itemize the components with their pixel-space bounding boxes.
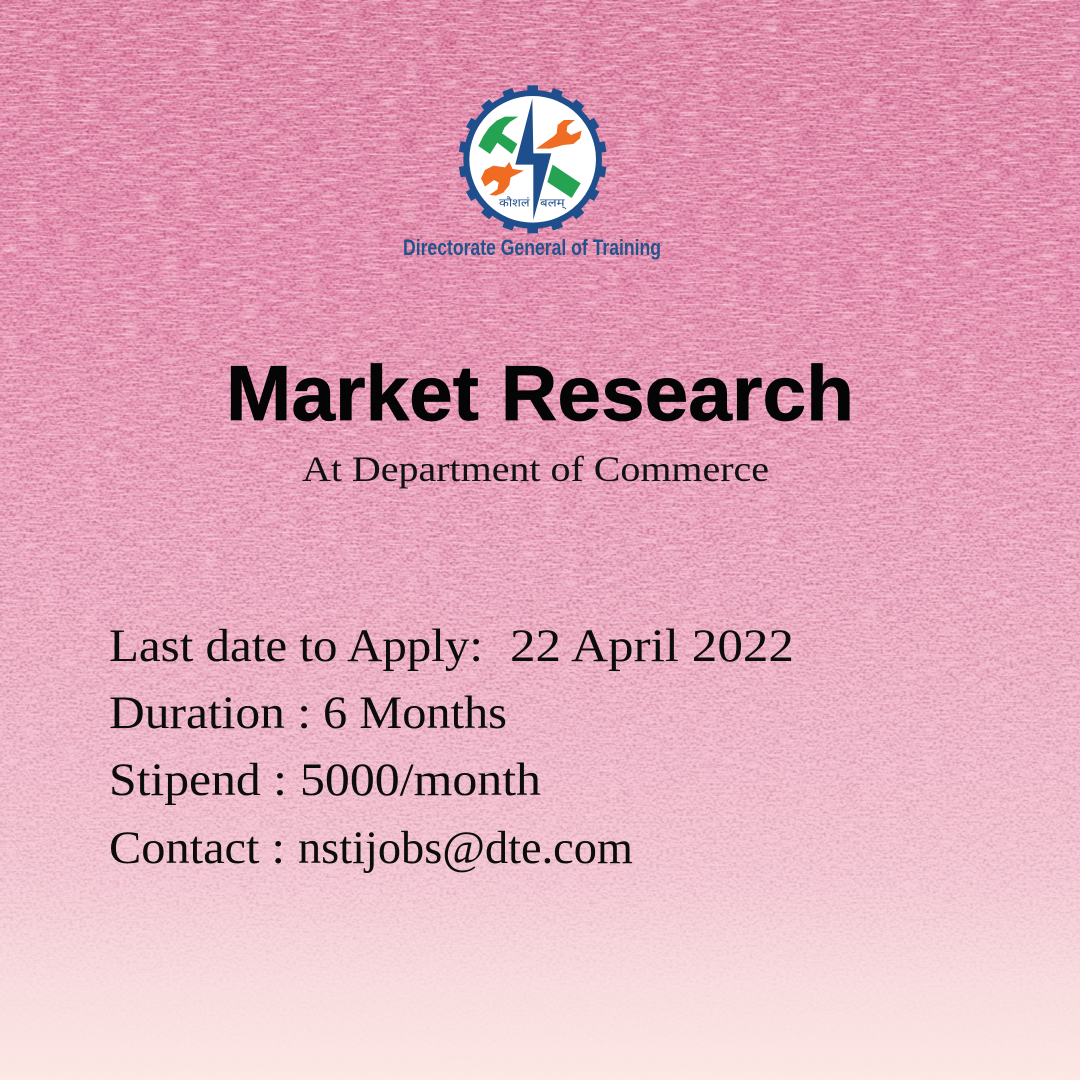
last date: 22 April 2022 [510,620,794,672]
motto: बलम् [540,198,567,210]
top wrench [536,120,582,149]
subtitle: At Department of Commerce [302,449,769,489]
hammer head [478,117,518,154]
white disc [469,96,596,223]
bottom wrench [481,162,524,196]
last date [109,620,794,672]
stipend: Stipend : [109,754,287,806]
details text block [109,620,794,874]
icon: gear emblem [459,85,606,233]
duration [109,687,507,739]
gear teeth [459,85,606,233]
stipend: 5000/month [300,754,541,806]
logo: Directorate General of Training [403,85,661,260]
contact [109,822,633,874]
title: Market Research [226,349,854,437]
motto: कौशलं [499,196,530,210]
stipend [109,754,541,806]
logo caption: Directorate General of Training [403,235,661,260]
duration: 6 Months [323,687,507,739]
lightning bolt [515,99,551,220]
contact: nstijobs@dte.com [298,822,633,874]
contact: Contact : [109,822,285,874]
hammer handle [547,165,581,198]
last date: Last date to Apply: [109,620,483,672]
duration: Duration : [109,687,311,739]
motto [499,196,567,210]
